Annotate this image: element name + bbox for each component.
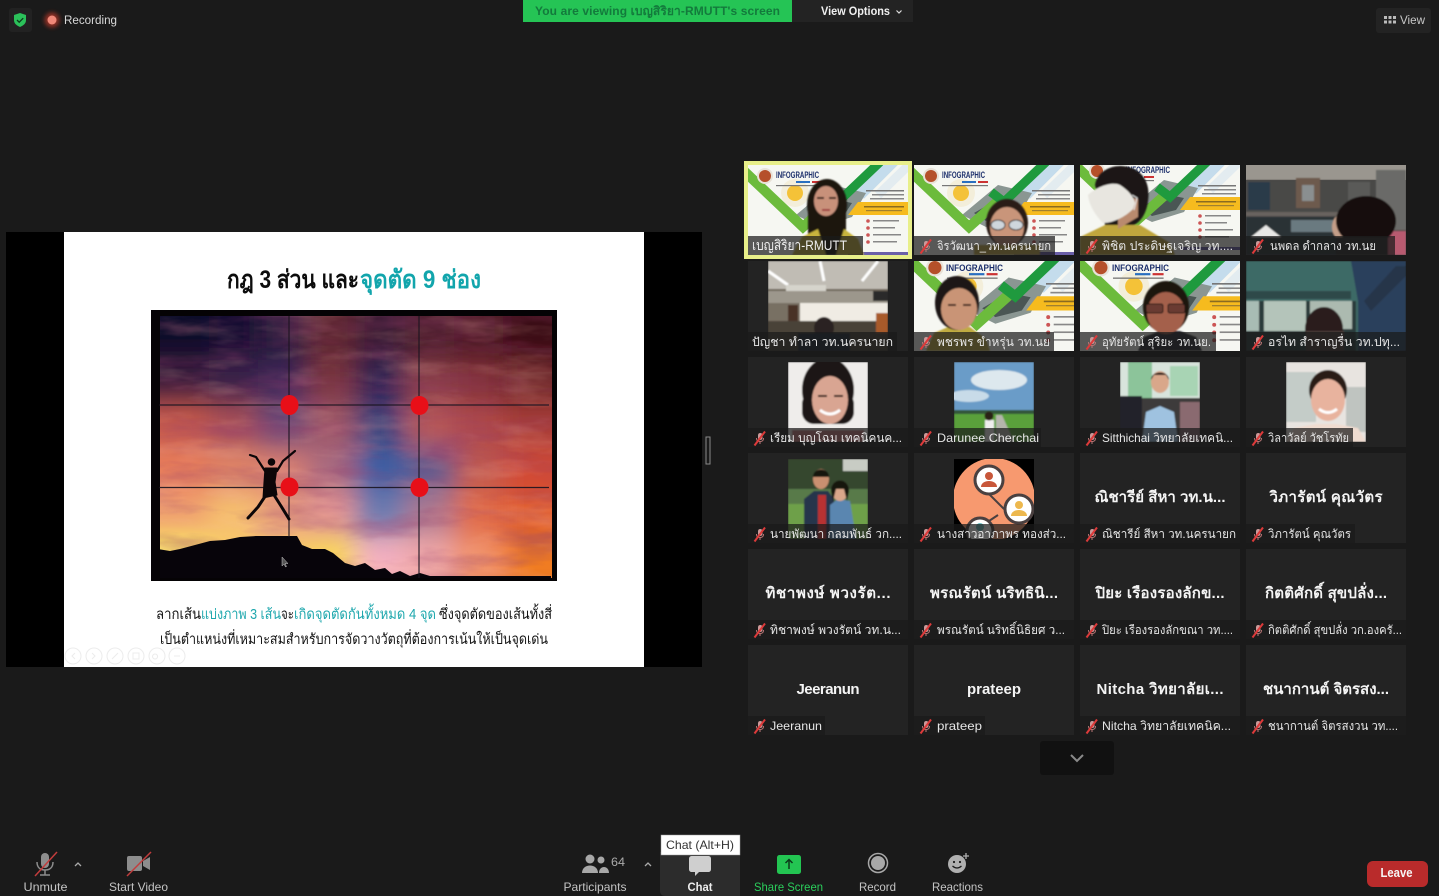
leave button: Leave	[1380, 866, 1413, 880]
name label: จิรวัฒนา_วท.นครนายก	[937, 239, 1051, 253]
caret	[645, 863, 651, 866]
tile: participant 17: ทิชาพงษ์ พวงรัต...	[766, 584, 890, 602]
name label	[1246, 620, 1406, 639]
tile: participant 6: INFOGRAPHIC	[946, 263, 1003, 273]
name label	[1080, 236, 1240, 255]
chat tooltip: Chat (Alt+H)	[666, 838, 734, 852]
participants control: 64	[611, 855, 625, 869]
green banner	[523, 0, 792, 22]
tile: participant 16: วิภารัตน์ คุณวัตร	[1269, 488, 1383, 507]
name label	[1080, 332, 1216, 351]
icon: recording dot	[44, 12, 60, 28]
tile: participant 22	[914, 645, 1074, 735]
tile: participant 19	[1080, 549, 1240, 639]
tile: participant 24: ชนากานต์ จิตรสง...	[1263, 680, 1389, 698]
tile: presenter: INFOGRAPHIC	[776, 170, 819, 180]
tile: participant 2: INFOGRAPHIC	[942, 170, 985, 180]
view options button: View Options	[821, 6, 890, 18]
slide heading: กฎ 3 ส่วน และ	[227, 266, 359, 294]
view layout button: View	[1400, 15, 1426, 27]
chat control	[660, 852, 740, 896]
share screen control: Share Screen	[754, 880, 823, 894]
name label: ปิยะ เรืองรองลักขณา วท....	[1101, 623, 1233, 637]
name label	[748, 620, 908, 639]
tile: participant 24	[1246, 645, 1406, 735]
name label: นพดล ดำกลาง วท.นย	[1270, 239, 1376, 253]
name label	[1246, 716, 1406, 735]
tile: participant 7	[1077, 242, 1275, 366]
tile: participant 11	[1080, 357, 1240, 447]
name label: prateep	[937, 719, 982, 733]
name label	[1080, 428, 1240, 447]
caret	[75, 863, 81, 866]
chat tooltip	[661, 835, 740, 855]
tile: participant 17	[748, 549, 908, 639]
tile: participant 5	[748, 261, 908, 351]
tile: participant 15: ณิชารีย์ สีหา วท.น...	[1094, 488, 1226, 506]
name label	[748, 716, 825, 735]
grid lines	[159, 316, 549, 578]
share screen control	[754, 855, 823, 894]
tile: participant 3: INFOGRAPHIC	[1126, 165, 1170, 175]
leave button	[1367, 861, 1428, 887]
slideshow control icons	[65, 648, 185, 664]
tile: participant 15	[1080, 453, 1240, 543]
name label	[748, 524, 908, 543]
tile: participant 21: Jeeranun	[796, 681, 860, 698]
name label: ณิชารีย์ สีหา วท.นครนายก	[1102, 527, 1236, 541]
name label	[914, 236, 1055, 255]
panel: shared screen slide	[6, 232, 702, 667]
name label: ปัญชา ทำลา วท.นครนายก	[752, 335, 893, 349]
name label	[748, 428, 908, 447]
name label: ชนากานต์ จิตรสงวน วท....	[1268, 719, 1398, 733]
tile: participant 20: กิตติศักดิ์ สุขปลั่ง...	[1265, 581, 1387, 603]
view options button	[792, 0, 913, 22]
tile: participant 18: พรณรัตน์ นริทธินิ...	[930, 584, 1058, 602]
reactions control	[932, 853, 983, 894]
view layout button	[1376, 8, 1431, 33]
record control	[859, 854, 896, 894]
top left status: security shield and recording	[9, 8, 117, 32]
gallery next page arrow	[1040, 741, 1114, 775]
name label: Jeeranun	[770, 719, 822, 733]
name label: วิลาวัลย์ วัชโรทัย	[1268, 431, 1349, 445]
name label: Nitcha วิทยาลัยเทคนิค...	[1102, 719, 1231, 733]
name label: พิชิต ประดิษฐเจริญ วท....	[1102, 239, 1233, 253]
tile: participant 23: Nitcha วิทยาลัยเ...	[1096, 680, 1224, 698]
name label	[1246, 524, 1355, 543]
name label: นางสาวอาภาพร ทองส่ว...	[937, 527, 1066, 541]
rule of thirds photo	[151, 310, 557, 581]
name label	[1246, 236, 1395, 255]
name label: พชรพร ขำหรุ่น วท.นย	[937, 335, 1050, 350]
tile: participant 3	[1075, 148, 1255, 260]
name label: Darunee Cherchai	[937, 431, 1039, 445]
name label: Sitthichai วิทยาลัยเทคนิ...	[1102, 431, 1233, 445]
tile: participant 9	[748, 357, 908, 447]
tile: participant 6	[911, 242, 1109, 366]
name label	[748, 332, 897, 351]
name label	[914, 620, 1074, 639]
tile: participant 13	[748, 453, 908, 543]
reactions control: Reactions	[932, 880, 983, 894]
name label	[1080, 716, 1240, 735]
name label: ทิชาพงษ์ พวงรัตน์ วท.น...	[770, 623, 901, 637]
slide heading	[227, 266, 481, 296]
slide body text: ลากเส้น	[156, 606, 201, 623]
tile: participant 7: INFOGRAPHIC	[1112, 263, 1169, 273]
name label: อรไท สำราญรื่น วท.ปทุ...	[1268, 333, 1400, 350]
name label: วิภารัตน์ คุณวัตร	[1268, 527, 1352, 542]
unmute control: Unmute	[24, 880, 68, 894]
participants control	[564, 854, 626, 894]
name label: พรณรัตน์ นริทธิ์นิธิยศ ว...	[937, 621, 1065, 637]
unmute control	[24, 852, 68, 894]
slide body text: แบ่งภาพ 3 เส้น	[201, 606, 281, 623]
name label	[1246, 428, 1353, 447]
tile: participant 8	[1246, 261, 1406, 351]
silhouette hill	[160, 536, 551, 578]
split view divider handle	[706, 437, 710, 464]
tile: participant 22: prateep	[967, 681, 1021, 698]
icon: security shield	[9, 8, 32, 32]
tile: presenter	[743, 153, 923, 265]
panel: participant gallery	[743, 148, 1406, 735]
tile: participant 18	[914, 549, 1074, 639]
mouse pointer	[282, 557, 288, 567]
bottom toolbar	[24, 835, 1428, 896]
name label	[914, 428, 1041, 447]
tile: participant 23	[1080, 645, 1240, 735]
name label	[914, 332, 1054, 351]
tile: participant 10	[914, 357, 1074, 447]
slide body text: เกิดจุดตัดกันทั้งหมด 4 จุด	[294, 603, 436, 623]
name label: เรียม บุญโฉม เทคนิคนค...	[770, 431, 902, 446]
start video control	[109, 852, 168, 894]
red intersection dots	[280, 395, 428, 497]
name label	[1080, 620, 1240, 639]
active speaker highlight	[744, 161, 912, 259]
tile: participant 14	[914, 453, 1074, 544]
slide body text: ซึ่งจุดตัดของเส้นทั้งสี่	[439, 603, 552, 623]
name label	[1080, 524, 1240, 543]
name label	[1246, 332, 1406, 351]
name label: อุทัยรัตน์ สุริยะ วท.นย.	[1102, 335, 1211, 350]
slide heading: จุดตัด 9 ช่อง	[360, 266, 481, 296]
recording label: Recording	[64, 15, 117, 27]
record control: Record	[859, 880, 896, 894]
green banner: You are viewing เบญสิริยา-RMUTT's screen	[535, 4, 780, 18]
name label: นายพัฒนา กลมพันธ์ วก....	[770, 527, 902, 541]
slide body text	[156, 603, 552, 648]
tile: participant 2	[909, 153, 1089, 265]
top banner: viewing screen	[523, 0, 913, 22]
tile: participant 16	[1246, 453, 1406, 543]
slide body text: จะ	[281, 607, 294, 623]
participants control: Participants	[564, 880, 626, 894]
tile: participant 19: ปิยะ เรืองรองลักข...	[1095, 584, 1224, 602]
jumping silhouette	[248, 451, 295, 519]
name label	[914, 716, 985, 735]
chat control: Chat	[688, 880, 712, 894]
name label: กิตติศักดิ์ สุขปลั่ง วก.องครั...	[1268, 621, 1402, 638]
name label	[914, 524, 1074, 543]
tile: participant 20	[1246, 549, 1406, 639]
name label: เบญสิริยา-RMUTT	[752, 237, 847, 253]
tile: participant 21	[748, 645, 908, 735]
tile: participant 12	[1246, 357, 1406, 447]
start video control: Start Video	[109, 880, 168, 894]
tile: participant 4	[1246, 165, 1406, 255]
slide body text: เป็นตำแหน่งที่เหมาะสมสำหรับการจัดวางวัตถุที่ต้องการเน้นให้เป็นจุดเด่น	[160, 629, 548, 648]
